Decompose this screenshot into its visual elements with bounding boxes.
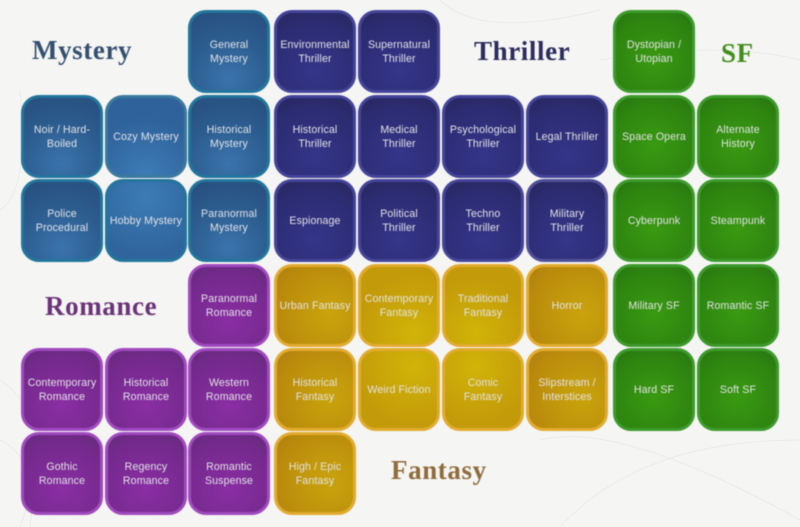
panel: SF tiles: Dystopian / [627, 39, 681, 51]
heading: SF: SF [721, 38, 754, 68]
panel: Thriller tiles: Thriller [382, 222, 416, 234]
panel: Mystery tiles: Historical [207, 124, 251, 136]
panel: Fantasy tiles: Fantasy [380, 307, 418, 319]
panel: SF tiles: Utopian [635, 53, 673, 65]
panel: Romance tiles: Regency [125, 461, 167, 473]
panel: Fantasy tiles: Interstices [542, 391, 592, 403]
panel: Romance tiles: Gothic [46, 461, 78, 473]
heading: Mystery: Mystery [32, 35, 132, 65]
panel: Romance tiles: Romance [206, 391, 252, 403]
panel: Thriller tiles: Thriller [550, 222, 584, 234]
panel: SF tiles: Space Opera [622, 131, 686, 143]
panel: Romance tiles: Western [209, 377, 249, 389]
panel: SF tiles: Romantic SF [707, 300, 769, 312]
panel: Thriller tiles: Military [550, 208, 584, 220]
panel: Thriller tiles: Psychological [450, 124, 516, 136]
panel: Mystery tiles: Mystery [210, 222, 248, 234]
panel: Mystery tiles: Mystery [210, 53, 248, 65]
panel: Fantasy tiles [273, 263, 609, 516]
panel: Thriller tiles: Techno [466, 208, 500, 220]
panel: Thriller tiles: Thriller [466, 222, 500, 234]
panel: Romance tiles: Romance [206, 307, 252, 319]
panel: Fantasy tiles: Slipstream / [538, 377, 596, 389]
panel: Mystery tiles: General [210, 39, 248, 51]
panel: Mystery tiles: Paranormal [201, 208, 257, 220]
panel: SF tiles [612, 9, 780, 432]
heading: Thriller: Thriller [474, 36, 570, 66]
panel: Fantasy tiles: Fantasy [296, 391, 334, 403]
panel: Mystery tiles: Boiled [47, 138, 77, 150]
panel: Thriller tiles: Thriller [298, 53, 332, 65]
panel: Romance tiles: Suspense [205, 475, 253, 487]
panel: Thriller tiles: Environmental [280, 39, 350, 51]
panel: Fantasy tiles: Fantasy [464, 307, 502, 319]
panel: Thriller tiles: Legal Thriller [536, 131, 598, 143]
panel: Mystery tiles [20, 9, 271, 263]
panel: SF tiles: Military SF [628, 300, 680, 312]
panel: Fantasy tiles: Traditional [458, 293, 508, 305]
panel: Mystery tiles: Procedural [36, 222, 88, 234]
panel: SF tiles: History [721, 138, 755, 150]
panel: Thriller tiles: Thriller [382, 138, 416, 150]
panel: Thriller tiles: Supernatural [368, 39, 430, 51]
panel: Romance tiles: Romance [39, 391, 85, 403]
panel: Romance tiles: Romance [123, 475, 169, 487]
panel: Romance tiles: Romantic [206, 461, 252, 473]
panel: Romance tiles [20, 263, 271, 516]
panel: Fantasy tiles: Fantasy [296, 475, 334, 487]
panel: SF tiles: Alternate [716, 124, 760, 136]
panel: SF tiles: Cyberpunk [628, 215, 680, 227]
panel: Mystery tiles: Police [47, 208, 77, 220]
panel: SF tiles: Steampunk [711, 215, 765, 227]
panel: SF tiles: Hard SF [634, 384, 674, 396]
panel: SF tiles: Soft SF [720, 384, 756, 396]
panel: Mystery tiles: Cozy Mystery [113, 131, 179, 143]
panel: Fantasy tiles: Historical [293, 377, 337, 389]
panel: Thriller tiles: Thriller [382, 53, 416, 65]
panel: Romance tiles: Romance [123, 391, 169, 403]
panel: Thriller tiles: Thriller [466, 138, 500, 150]
panel: Fantasy tiles: Fantasy [464, 391, 502, 403]
panel: Thriller tiles: Thriller [298, 138, 332, 150]
panel: Thriller tiles: Political [380, 208, 418, 220]
panel: Thriller tiles: Historical [293, 124, 337, 136]
panel: Fantasy tiles: Comic [468, 377, 498, 389]
panel: Thriller tiles: Espionage [289, 215, 341, 227]
panel: Romance tiles: Contemporary [28, 377, 96, 389]
panel: Mystery tiles: Hobby Mystery [110, 215, 182, 227]
panel: Romance tiles: Historical [124, 377, 168, 389]
panel: Romance tiles: Romance [39, 475, 85, 487]
panel: Fantasy tiles: Horror [552, 300, 582, 312]
panel: Fantasy tiles: Weird Fiction [367, 384, 431, 396]
heading: Fantasy: Fantasy [391, 455, 487, 485]
panel: Romance tiles: Paranormal [201, 293, 257, 305]
heading: Romance: Romance [45, 291, 157, 321]
panel: Thriller tiles: Medical [380, 124, 418, 136]
panel: Fantasy tiles: High / Epic [289, 461, 341, 473]
panel: Fantasy tiles: Urban Fantasy [279, 300, 351, 312]
panel: Thriller tiles [273, 9, 609, 263]
panel: Mystery tiles: Noir / Hard- [34, 124, 90, 136]
panel: Mystery tiles: Mystery [210, 138, 248, 150]
panel: Fantasy tiles: Contemporary [365, 293, 433, 305]
